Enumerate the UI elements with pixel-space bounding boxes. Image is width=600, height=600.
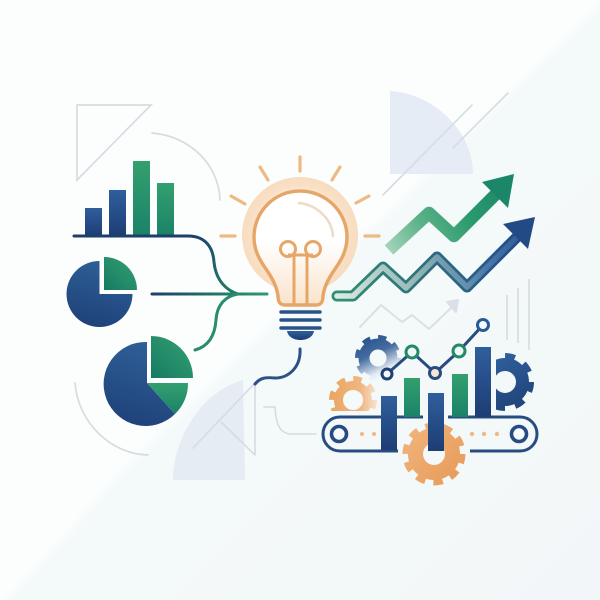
bulb highlight [299,203,333,236]
bulb base [281,312,320,340]
growth arrow blue [337,217,535,296]
conveyor bar 4 [452,374,468,417]
gear blue top left [358,338,398,378]
bar 4 [157,183,174,236]
light bulb [221,157,379,340]
pie chart large [104,336,193,426]
bar 3 [133,161,150,236]
bulb wire [255,349,300,384]
belt wheel right [512,426,526,442]
decorative quarter shape bottom left [173,380,316,480]
pie chart small [66,257,137,327]
gear orange small [332,379,374,421]
connector lines into bulb [74,236,267,350]
belt wheel left [332,426,346,442]
decorative outline triangle and arcs [75,105,220,455]
bar 2 [109,190,126,236]
bulb rays [221,157,379,236]
conveyor bar 5 [475,347,491,417]
bulb filament [280,242,320,304]
decorative vertical lines [507,279,529,350]
conveyor bar 1 [381,396,397,450]
growth arrow green [389,174,514,250]
belt outline [323,417,537,451]
decorative small trend arrow [360,300,458,329]
conveyor bar 3 [428,393,444,451]
bar chart on conveyor [381,347,491,451]
infographic canvas [66,91,600,600]
bulb glass [254,191,347,305]
bar 1 [85,208,102,236]
line chart with markers [382,320,488,379]
decorative quarter circle top right [383,91,508,195]
belt dots [360,432,499,436]
gear orange large [406,426,462,482]
gear blue right [496,353,534,411]
bulb glow [242,177,358,293]
conveyor belt [323,417,537,451]
conveyor bar 2 [404,378,420,417]
bar chart top left [85,161,174,236]
